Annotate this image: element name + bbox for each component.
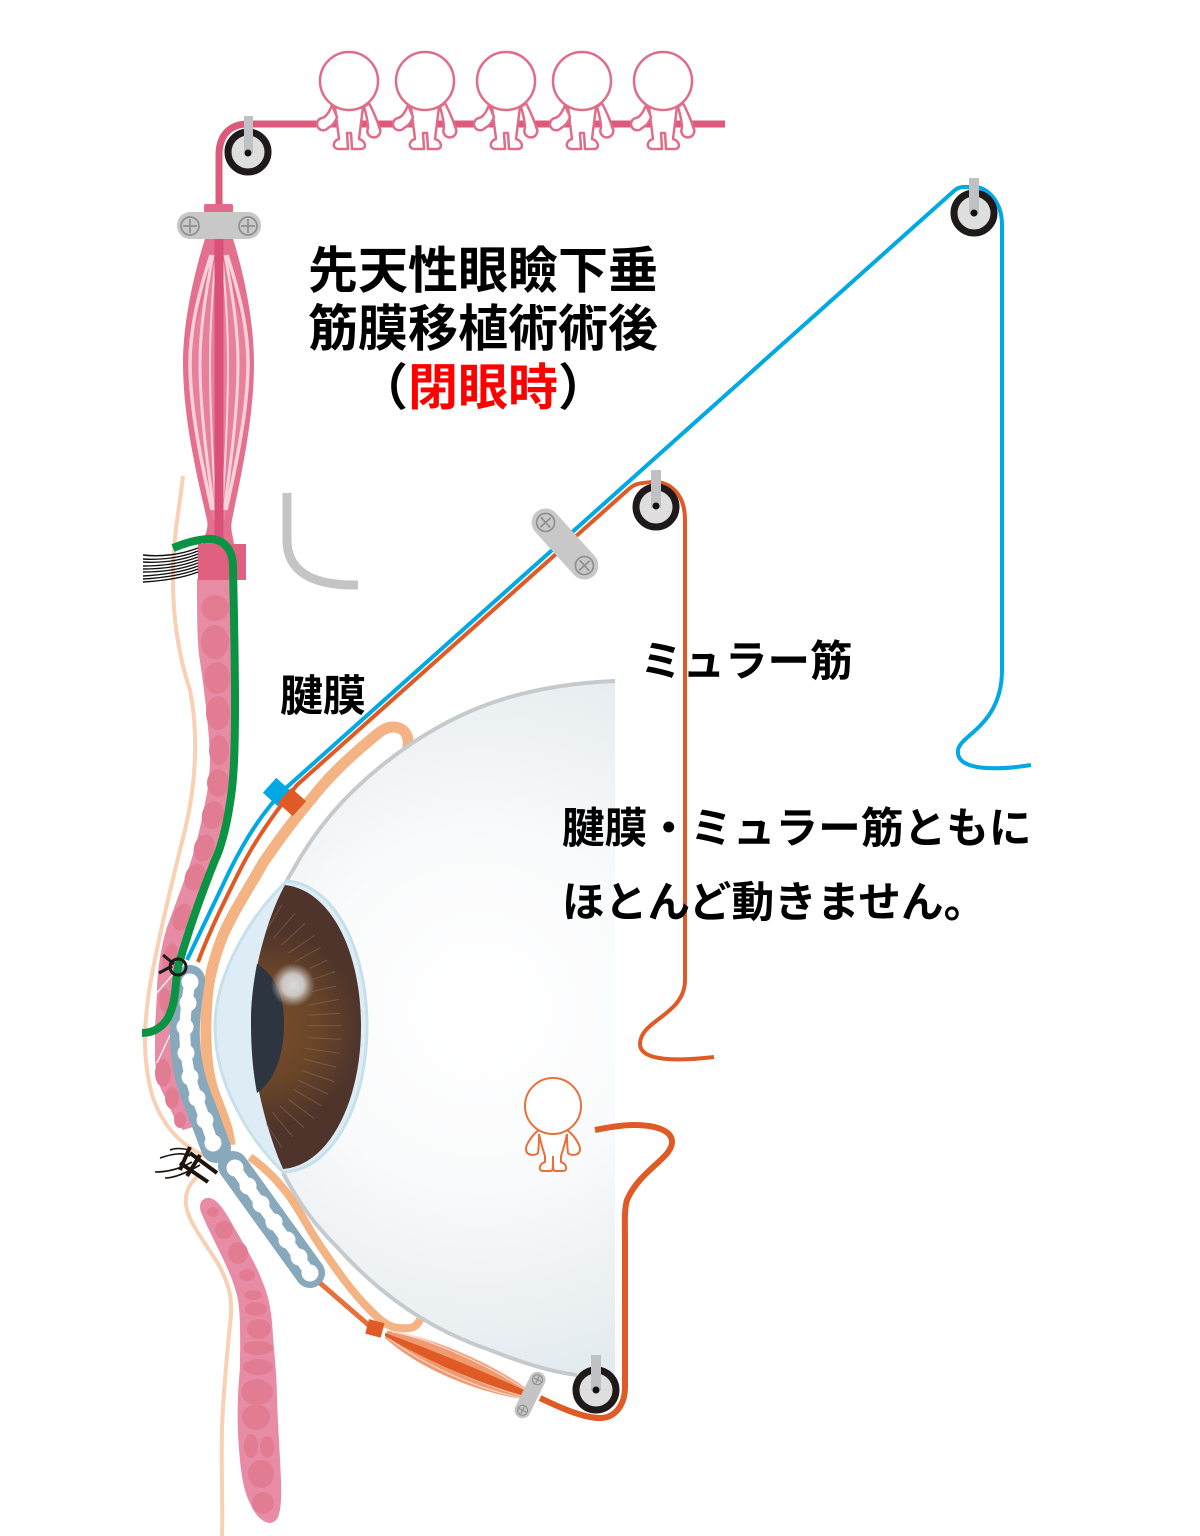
pupil xyxy=(251,964,284,1093)
label: aponeurosis: 腱膜 xyxy=(280,673,366,721)
skin line upper xyxy=(145,476,205,1156)
gray bracket curve xyxy=(287,493,358,585)
upper eyelid orbicularis muscle xyxy=(155,579,235,1130)
eyeball sclera xyxy=(283,681,615,1380)
skin line lower xyxy=(186,1177,231,1536)
iris highlight xyxy=(271,963,315,1007)
lower eyelid muscle xyxy=(200,1198,281,1523)
small clamp xyxy=(512,1369,548,1421)
clamp top xyxy=(177,212,261,239)
pink character 3 xyxy=(474,52,537,149)
peach conjunctiva band lower xyxy=(250,1157,420,1328)
title xyxy=(308,243,658,416)
pink character 4 xyxy=(550,52,613,149)
orange thin lower tendon xyxy=(320,1283,372,1328)
peach conjunctiva band upper xyxy=(206,727,408,1145)
pulley middle xyxy=(636,470,676,527)
pink character 5 xyxy=(631,52,694,149)
pulley bottom xyxy=(576,1355,616,1410)
orange Muller muscle line xyxy=(198,482,714,1059)
clamp diagonal xyxy=(526,503,604,585)
blue marker xyxy=(263,778,291,806)
pulley top left xyxy=(228,116,268,172)
description text: 腱膜・ミュラー筋ともに xyxy=(562,805,1032,853)
upper tarsus plate xyxy=(176,974,222,1152)
description text xyxy=(562,805,1032,927)
pink tab xyxy=(204,204,233,214)
orange thick lower tendon xyxy=(540,1125,672,1418)
upper eyelashes xyxy=(143,548,198,582)
lower eyelashes xyxy=(155,1147,217,1182)
label: Muller muscle: ミュラー筋 xyxy=(640,639,853,686)
pink character 1 xyxy=(317,52,380,149)
suture knot xyxy=(159,955,186,975)
orange marker xyxy=(278,788,306,816)
title: 先天性眼瞼下垂 xyxy=(308,243,658,299)
lower rectus muscle spindle xyxy=(385,1331,528,1399)
iris xyxy=(251,885,361,1169)
levator muscle spindle xyxy=(183,238,254,545)
description text: ほとんど動きません。 xyxy=(562,879,986,927)
lower tarsus plate xyxy=(226,1160,318,1282)
title: （閉眼時） xyxy=(358,360,608,416)
orange square lower xyxy=(365,1319,385,1338)
orange character xyxy=(525,1078,581,1171)
pulley top right xyxy=(954,178,994,233)
levator muscle block xyxy=(198,544,246,580)
green fascia graft xyxy=(142,539,235,1033)
title: 筋膜移植術術後 xyxy=(308,301,658,357)
pink character 2 xyxy=(393,52,456,149)
blue aponeurosis line xyxy=(187,187,1031,960)
pink tendon rope xyxy=(219,124,725,215)
cornea xyxy=(215,881,367,1172)
